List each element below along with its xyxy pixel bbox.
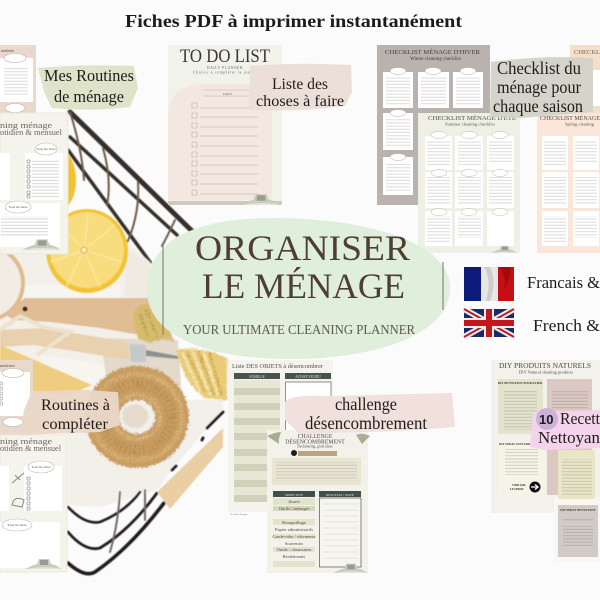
label: checklist du menage pour chaque saison: chaque saison bbox=[493, 96, 583, 116]
label: 10 recettes nettoyants bbox=[530, 408, 600, 450]
wood brush one bbox=[3, 298, 175, 343]
document: routines to complete (pink, bottom): nadaires bbox=[0, 363, 15, 368]
label: checklist du menage pour chaque saison: Checklist du bbox=[497, 58, 581, 78]
recipe card: pink bbox=[547, 379, 592, 495]
document: autumn checklist bbox=[570, 45, 600, 115]
icon: british flag bbox=[464, 309, 514, 337]
bottom basket rails bbox=[68, 412, 223, 574]
document: routines to complete: ning ménage bbox=[0, 436, 52, 446]
document: list of objects to declutter bbox=[228, 360, 333, 516]
document: routines (pink, top) bbox=[0, 45, 36, 113]
document: spring checklist bbox=[537, 113, 600, 253]
document: routines to complete bbox=[0, 435, 67, 572]
yellow brush bristles bbox=[176, 349, 227, 400]
document: declutter challenge: Garde-robe / vêtements bbox=[272, 534, 316, 539]
recipe card: green: DIY NETTOYANT POUR EVIER bbox=[498, 381, 543, 385]
label: checklist du menage pour chaque saison bbox=[490, 57, 593, 118]
recipe card: grey bbox=[558, 505, 598, 557]
label: challenge desencombrement: désencombrement bbox=[305, 413, 427, 433]
central title badge bbox=[147, 218, 450, 359]
document: spring checklist: Spring cleaning bbox=[565, 122, 595, 126]
icon: arrow button bbox=[530, 482, 540, 492]
document: declutter challenge: Decluttering, good ideas bbox=[297, 444, 333, 450]
document: to do list: TO DO LIST bbox=[180, 46, 270, 67]
document: declutter challenge: Souvenirs bbox=[285, 541, 303, 546]
document: to do list: Choisir à compléter la journée bbox=[193, 70, 260, 74]
document: declutter challenge: RESULTAT / NOTE bbox=[326, 493, 354, 497]
label: francais: Francais & bbox=[527, 273, 600, 292]
lemon bbox=[46, 209, 128, 293]
label: mes routines de menage: Mes Routines bbox=[44, 66, 134, 85]
document: declutter challenge: Bourgeillage bbox=[282, 520, 306, 525]
wooden ring bbox=[0, 246, 23, 320]
document: routines to complete: Tous les mois bbox=[7, 523, 27, 527]
document: declutter challenge: Papier administratifs bbox=[275, 527, 313, 532]
label: liste des choses a faire: Liste des bbox=[272, 76, 328, 93]
document: diy natural products: DIY PRODUITS NATURELS bbox=[499, 362, 591, 370]
wood brush two bbox=[0, 328, 178, 362]
document: to do list bbox=[168, 45, 282, 205]
document: summer checklist bbox=[418, 113, 520, 253]
document: declutter challenge bbox=[267, 430, 370, 573]
document: declutter challenge: Outils / chaussures bbox=[277, 547, 312, 552]
document: summer checklist: Summer cleaning checklist bbox=[445, 122, 495, 126]
recipe card: green bbox=[498, 379, 543, 434]
rope bbox=[0, 316, 70, 355]
document: declutter challenge: Rechéments bbox=[283, 554, 305, 559]
natural fibre ring bbox=[92, 374, 182, 460]
label: routines a completer bbox=[20, 390, 120, 435]
icon: french flag bbox=[464, 267, 514, 301]
document: routines to complete: otidien & mensuel bbox=[0, 444, 62, 453]
document: winter checklist: CHECKLIST MÉNAGE D'HIVER bbox=[385, 48, 481, 56]
document: declutter challenge: Outils / ménager bbox=[279, 506, 310, 511]
document: declutter challenge: DÉSENCOMBREMENT bbox=[285, 438, 345, 446]
label: 10 recettes nettoyants: 10 bbox=[539, 412, 553, 427]
document: to do list: DAILY PLANNER bbox=[207, 66, 243, 70]
document: list of objects to declutter: ACHAT/VENDU bbox=[295, 375, 321, 379]
label: checklist du menage pour chaque saison: ménage pour bbox=[497, 77, 581, 97]
label: routines a completer: compléter bbox=[42, 416, 109, 433]
basket wooden handle bbox=[157, 428, 223, 509]
subtitle: YOUR ULTIMATE CLEANING PLANNER bbox=[183, 323, 416, 338]
document: declutter challenge: CHALLENGE bbox=[298, 434, 333, 440]
recipe card: yellow bbox=[558, 450, 595, 499]
recipe card: cream: LE SPRAY bbox=[510, 488, 524, 491]
document: daily and monthly routine: otidien & mensuel bbox=[0, 128, 63, 137]
recipe card: cream: VOIR SUR bbox=[512, 484, 527, 487]
document: daily and monthly routine: ning ménage bbox=[0, 120, 52, 130]
document: daily and monthly routine bbox=[0, 113, 68, 254]
label: mes routines de menage bbox=[38, 65, 138, 110]
label: routines a completer: Routines à bbox=[41, 397, 110, 414]
document: declutter challenge: OBJECTIVE bbox=[285, 493, 303, 497]
document: winter checklist: Winter cleaning checklist bbox=[410, 57, 461, 62]
document: routines to complete: Tous les Soirs bbox=[31, 465, 51, 469]
title: Fiches PDF à imprimer instantanément bbox=[125, 11, 462, 31]
label: 10 recettes nettoyants: Nettoyan bbox=[538, 428, 600, 447]
document: summer checklist: CHECKLIST MÉNAGE D'ÉTÉ bbox=[428, 114, 516, 122]
document: diy natural products: DIY Natural cleaning products bbox=[519, 370, 573, 374]
cloth bbox=[0, 240, 223, 507]
label: liste des choses a faire: choses à faire bbox=[256, 93, 344, 110]
recipe card: cream bbox=[498, 442, 545, 495]
recipe card: cream: DIY SPRAY ANTI-MOISISSURE bbox=[499, 442, 543, 446]
back lemon bbox=[48, 152, 76, 208]
heading second line: LE MÉNAGE bbox=[202, 266, 405, 306]
document: declutter challenge: Jouets bbox=[288, 499, 300, 504]
document: routines (pink, top): nadaire bbox=[1, 48, 14, 53]
document: to do list: DATE bbox=[223, 92, 232, 96]
document: autumn checklist: CHECKL bbox=[574, 49, 600, 56]
recipe card: grey: DIY SPRAY NETTOYANT bbox=[560, 508, 596, 512]
document: diy natural products bbox=[491, 360, 600, 562]
cleaning photo: basket, lemon and brushes bbox=[0, 112, 227, 574]
yellow wooden board bbox=[0, 345, 92, 395]
label: mes routines de menage: de ménage bbox=[54, 87, 124, 106]
top basket rails bbox=[68, 112, 193, 262]
heading: ORGANISER bbox=[195, 228, 410, 268]
label: french: French & bbox=[533, 316, 600, 335]
label: challenge desencombrement: challenge bbox=[335, 394, 397, 414]
label: liste des choses a faire bbox=[249, 64, 352, 110]
document: winter checklist bbox=[377, 45, 490, 205]
document: list of objects to declutter: Liste DES OBJETS à désencombrer bbox=[232, 363, 324, 370]
document: list of objects to declutter: Fin Utile Designs bbox=[230, 513, 248, 516]
document: daily and monthly routine: Tous les Soirs bbox=[36, 147, 56, 151]
document: daily and monthly routine: Tous les mois bbox=[8, 205, 28, 209]
document: list of objects to declutter: FAMILLE bbox=[249, 375, 265, 379]
label: challenge desencombrement bbox=[285, 393, 455, 434]
document: routines to complete (pink, bottom) bbox=[0, 360, 33, 435]
